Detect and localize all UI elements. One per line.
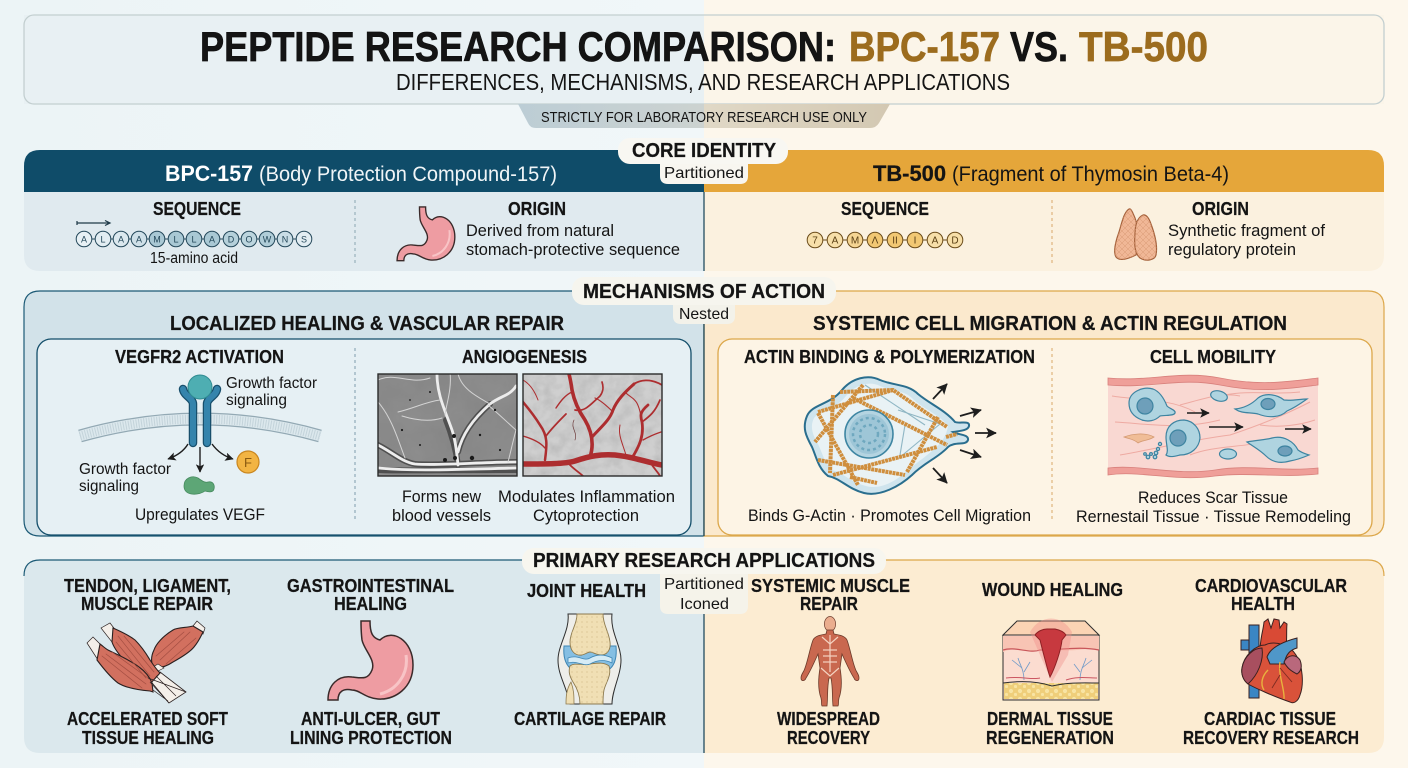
icon: cell with actin network xyxy=(805,377,969,494)
arrow: sequence direction xyxy=(77,220,110,226)
caption: widespread recovery: RECOVERY xyxy=(787,728,870,748)
icon: stomach xyxy=(397,207,455,261)
caption: cardiac tissue xyxy=(1183,709,1359,748)
caption: anti-ulcer: ANTI-ULCER, GUT xyxy=(301,709,440,729)
origin text xyxy=(466,221,680,259)
origin label: ORIGIN xyxy=(1192,199,1249,219)
icon: knee joint xyxy=(558,614,621,704)
icon: factor F xyxy=(237,451,259,473)
caption: modulates inflammation: Modulates Inflammation xyxy=(498,488,675,506)
heading: joint health: JOINT HEALTH xyxy=(527,581,646,601)
heading: cardiovascular xyxy=(1195,576,1347,614)
section label: primary research applications: PRIMARY RESEARCH APPLICATIONS xyxy=(533,550,875,572)
peptide chain TB-500: II xyxy=(892,236,898,246)
peptide chain BPC-157: L xyxy=(191,234,197,244)
center divider: mechanisms xyxy=(703,305,705,536)
peptide chain TB-500: Λ xyxy=(872,236,879,246)
section label: core identity: Partitioned xyxy=(664,165,744,182)
peptide chain BPC-157: A xyxy=(209,234,215,244)
panel: mechanisms TB-500 xyxy=(704,291,1384,536)
BPC-157 heading: (Body Protection Compound-157) xyxy=(259,163,557,186)
section label: primary research applications: Iconed xyxy=(680,596,729,613)
image: grayscale vessels xyxy=(378,372,517,476)
caption: binds G-actin: Binds G-Actin · Promotes Cell Migration xyxy=(748,507,1031,525)
panel: applications BPC-157 xyxy=(24,560,704,753)
icon: VEGF blob xyxy=(184,477,214,494)
peptide chain TB-500: D xyxy=(951,236,959,246)
caption: cardiac tissue: RECOVERY RESEARCH xyxy=(1183,728,1359,748)
caption: cardiac tissue: CARDIAC TISSUE xyxy=(1204,709,1336,729)
origin text: stomach-protective sequence xyxy=(466,240,680,259)
icon: stomach xyxy=(328,621,413,700)
peptide chain BPC-157: L xyxy=(100,234,106,244)
section label: core identity: CORE IDENTITY xyxy=(632,140,777,162)
caption: forms new blood vessels xyxy=(392,488,491,525)
caption: widespread recovery: WIDESPREAD xyxy=(777,709,880,729)
caption: upregulates VEGF: Upregulates VEGF xyxy=(135,505,265,524)
icon: human muscular figure xyxy=(801,616,859,706)
title: BPC-157 xyxy=(849,23,1000,70)
peptide chain BPC-157 xyxy=(76,231,312,247)
caption: dermal tissue: REGENERATION xyxy=(986,728,1114,748)
origin text: Derived from natural xyxy=(466,221,614,240)
caption: anti-ulcer: LINING PROTECTION xyxy=(290,728,452,748)
icon: factor F: F xyxy=(244,455,252,470)
section label: mechanisms of action xyxy=(572,277,836,324)
center divider: applications xyxy=(703,614,705,753)
heading: gastrointestinal xyxy=(287,576,454,614)
peptide chain BPC-157: W xyxy=(263,234,272,244)
panel: mechanisms BPC-157 xyxy=(24,291,704,536)
caption: reduces scar tissue xyxy=(1076,489,1351,526)
nested panel: VEGFR2 and angiogenesis xyxy=(37,339,691,535)
growth factor label top xyxy=(226,375,318,409)
actin heading: ACTIN BINDING & POLYMERIZATION xyxy=(744,347,1035,367)
chain caption: 15-amino acid xyxy=(150,250,238,267)
caption: anti-ulcer xyxy=(290,709,452,748)
heading: wound healing: WOUND HEALING xyxy=(982,580,1123,600)
subtitle: DIFFERENCES, MECHANISMS, AND RESEARCH APPLICATIONS xyxy=(396,69,1010,95)
caption: modulates inflammation: Cytoprotection xyxy=(533,507,639,525)
cell mobility heading: CELL MOBILITY xyxy=(1150,347,1276,367)
caption: widespread recovery xyxy=(777,709,880,748)
icon: muscles xyxy=(87,621,205,703)
center divider: core xyxy=(703,192,705,271)
caption: cartilage repair: CARTILAGE REPAIR xyxy=(514,709,666,729)
caption: reduces scar tissue: Reduces Scar Tissue xyxy=(1138,489,1288,507)
origin text xyxy=(1168,221,1325,259)
icon: anatomical heart xyxy=(1241,619,1302,703)
TB-500 heading xyxy=(873,161,1229,186)
sequence label: SEQUENCE xyxy=(841,199,929,219)
arrows: migration xyxy=(933,384,996,483)
growth factor label top: signaling xyxy=(226,392,287,409)
BPC-157 heading: BPC-157 xyxy=(165,161,253,186)
origin text: regulatory protein xyxy=(1168,240,1296,259)
panel: core identity TB-500 xyxy=(704,150,1384,271)
peptide chain TB-500: I xyxy=(914,236,916,246)
heading: systemic muscle: SYSTEMIC MUSCLE xyxy=(751,576,910,596)
TB-500 heading: TB-500 xyxy=(873,161,946,186)
peptide chain BPC-157: D xyxy=(228,234,235,244)
peptide chain BPC-157: L xyxy=(173,234,179,244)
icon: VEGFR2 receptor xyxy=(183,375,217,443)
angiogenesis heading: ANGIOGENESIS xyxy=(462,347,587,367)
peptide chain BPC-157: M xyxy=(153,234,161,244)
heading: systemic muscle: REPAIR xyxy=(800,594,858,614)
heading: tendon: TENDON, LIGAMENT, xyxy=(64,576,231,596)
peptide chain BPC-157: A xyxy=(136,234,142,244)
caption: soft tissue: ACCELERATED SOFT xyxy=(67,709,228,729)
caption: dermal tissue xyxy=(986,709,1114,748)
peptide chain BPC-157: A xyxy=(81,234,87,244)
title: TB-500 xyxy=(1079,23,1208,70)
heading: tendon: MUSCLE REPAIR xyxy=(81,594,213,614)
caption: soft tissue xyxy=(67,709,228,748)
caption: forms new blood vessels: blood vessels xyxy=(392,507,491,525)
section label: mechanisms of action: MECHANISMS OF ACTION xyxy=(583,281,825,303)
growth factor label lower: signaling xyxy=(79,478,139,495)
heading: gastrointestinal: HEALING xyxy=(334,594,407,614)
growth factor label lower xyxy=(79,461,172,495)
heading: cardiovascular: CARDIOVASCULAR xyxy=(1195,576,1347,596)
disclaimer tab: STRICTLY FOR LABORATORY RESEARCH USE ONLY xyxy=(541,110,867,126)
heading: LOCALIZED HEALING & VASCULAR REPAIR xyxy=(170,313,565,335)
panel: applications TB-500 xyxy=(704,560,1384,753)
icon: cell membrane xyxy=(80,419,320,436)
section label: core identity xyxy=(618,138,788,184)
disclaimer tab xyxy=(518,104,890,128)
peptide chain TB-500: 7 xyxy=(812,236,818,246)
icon: cells migrating through tissue xyxy=(1108,375,1318,478)
heading: cardiovascular: HEALTH xyxy=(1231,594,1295,614)
heading: tendon xyxy=(64,576,231,614)
arrows: signaling xyxy=(168,444,233,472)
VEGFR2 heading: VEGFR2 ACTIVATION xyxy=(115,347,284,367)
peptide chain BPC-157: O xyxy=(245,234,253,244)
peptide chain TB-500: M xyxy=(851,236,859,246)
heading: systemic muscle xyxy=(751,576,910,614)
image: red vessels xyxy=(523,374,662,476)
origin text: Synthetic fragment of xyxy=(1168,221,1325,240)
peptide chain BPC-157: S xyxy=(301,234,307,244)
caption: dermal tissue: DERMAL TISSUE xyxy=(987,709,1113,729)
peptide chain BPC-157: A xyxy=(118,234,124,244)
icon: skin cross-section with wound xyxy=(1003,618,1099,700)
title: VS. xyxy=(1010,23,1068,70)
caption: forms new blood vessels: Forms new xyxy=(402,488,481,506)
nested panel: actin and mobility xyxy=(718,339,1372,535)
section label: mechanisms of action: Nested xyxy=(679,306,729,323)
icon: thyroid gland xyxy=(1115,209,1157,260)
peptide chain TB-500: A xyxy=(932,236,939,246)
peptide chain TB-500 xyxy=(807,232,963,248)
title panel xyxy=(24,15,1384,104)
origin label: ORIGIN xyxy=(508,199,566,219)
heading: gastrointestinal: GASTROINTESTINAL xyxy=(287,576,454,596)
title: PEPTIDE RESEARCH COMPARISON: xyxy=(200,23,836,70)
peptide chain BPC-157: N xyxy=(282,234,288,244)
section label: primary research applications xyxy=(522,548,886,614)
growth factor label lower: Growth factor xyxy=(79,461,172,478)
TB-500 heading: (Fragment of Thymosin Beta-4) xyxy=(952,163,1229,186)
caption: modulates inflammation xyxy=(498,488,675,525)
sequence label: SEQUENCE xyxy=(153,199,241,219)
section label: primary research applications: Partitioned xyxy=(664,576,744,593)
panel: core identity BPC-157 xyxy=(24,150,704,271)
heading: SYSTEMIC CELL MIGRATION & ACTIN REGULATION xyxy=(813,313,1287,335)
peptide chain TB-500: A xyxy=(832,236,839,246)
caption: soft tissue: TISSUE HEALING xyxy=(82,728,214,748)
BPC-157 heading xyxy=(165,161,557,186)
caption: reduces scar tissue: Rernestail Tissue · Tissue Remodeling xyxy=(1076,508,1351,526)
growth factor label top: Growth factor xyxy=(226,375,318,392)
